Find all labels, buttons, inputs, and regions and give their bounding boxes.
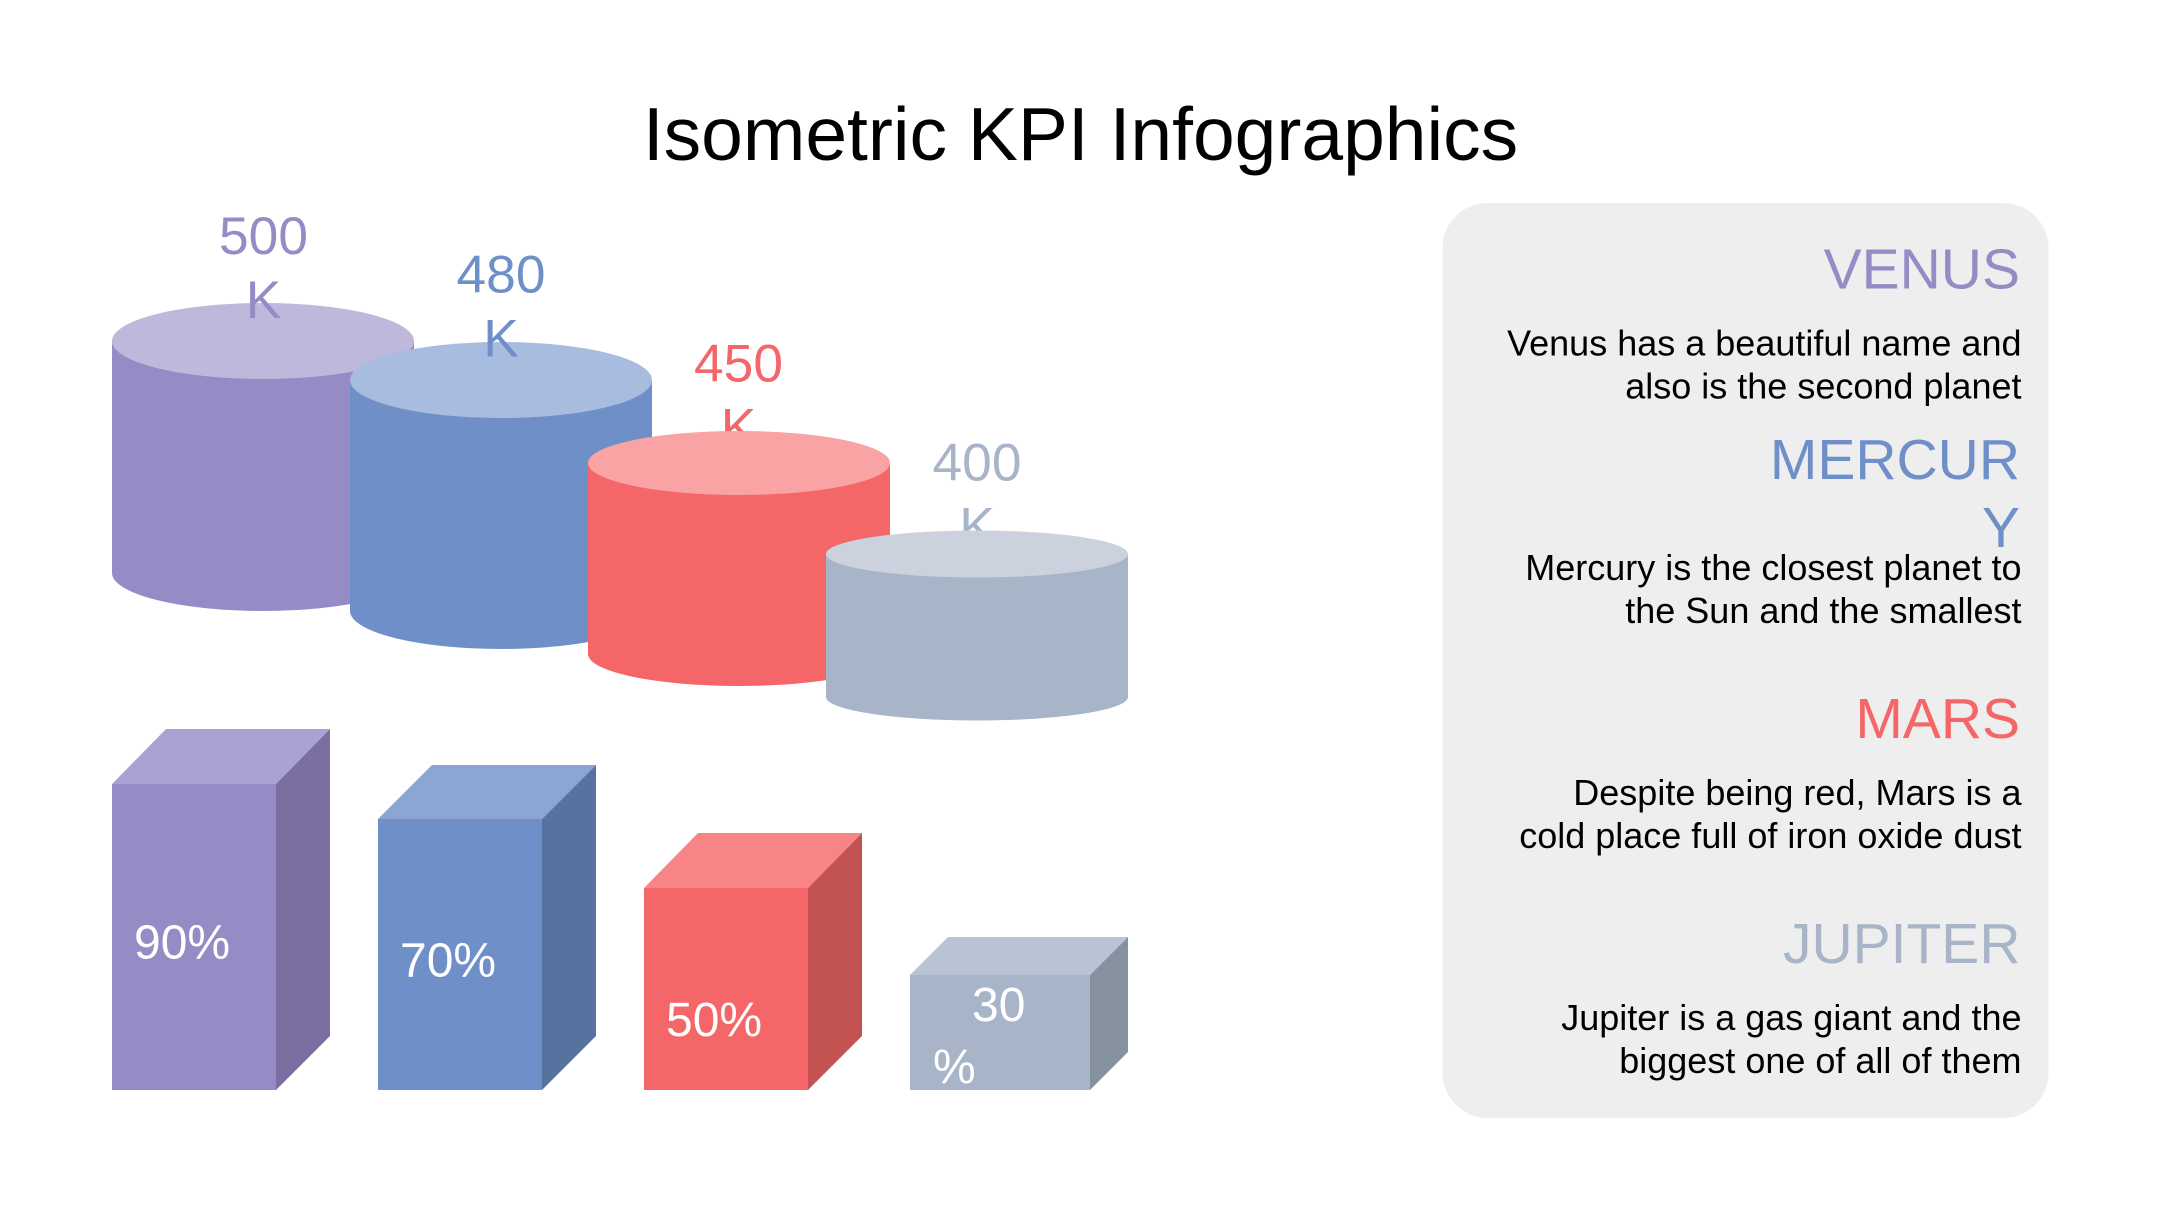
cylinder: red <box>588 431 890 686</box>
item: Mars <box>1519 687 2022 856</box>
item: Jupiter: JUPITER <box>1783 912 2020 976</box>
box: 90% <box>112 729 330 1090</box>
cylinder label: 450K: 450 <box>694 334 783 394</box>
box chart <box>112 729 1128 1094</box>
box: 30% <box>910 937 1128 1094</box>
item: Mercury <box>1525 428 2022 631</box>
cylinder label: 400K: 400 <box>933 434 1021 492</box>
cylinder label: 500K: K <box>246 271 281 330</box>
cylinder label: 450K: K <box>721 398 756 458</box>
box: 30%: % <box>933 1041 976 1094</box>
box: 30%: 30 <box>972 979 1025 1032</box>
item: Jupiter <box>1561 912 2022 1081</box>
panel: planets <box>1442 203 2048 1118</box>
cylinder: blue <box>350 342 652 649</box>
box: 90%: 90% <box>134 916 230 970</box>
cylinder label: 480K: K <box>483 310 519 368</box>
item: Jupiter: Jupiter is a gas giant and the <box>1561 997 2022 1038</box>
cylinder label: 400K <box>933 434 1021 556</box>
cylinder chart <box>112 207 1128 720</box>
item: Jupiter: biggest one of all of them <box>1619 1040 2022 1081</box>
box: 50%: 50% <box>666 994 762 1047</box>
cylinder label: 500K <box>219 207 308 330</box>
item: Mars: cold place full of iron oxide dust <box>1519 815 2022 856</box>
item: Venus <box>1507 238 2022 406</box>
cylinder label: 480K <box>457 246 545 368</box>
cylinder label: 500K: 500 <box>219 207 308 266</box>
item: Mars: Despite being red, Mars is a <box>1573 772 2022 813</box>
item: Venus: Venus has a beautiful name and <box>1507 322 2022 364</box>
item: Mercury: MERCUR <box>1770 428 2020 492</box>
item: Mars: MARS <box>1855 687 2020 751</box>
box: 50% <box>644 833 862 1090</box>
cylinder: grey <box>826 530 1128 720</box>
box: 70%: 70% <box>400 934 496 988</box>
title: Isometric KPI Infographics <box>643 92 1518 176</box>
item: Venus: VENUS <box>1824 238 2020 302</box>
cylinder label: 450K <box>694 334 783 458</box>
cylinder: purple <box>112 303 414 611</box>
item: Mercury: Mercury is the closest planet to <box>1525 547 2022 588</box>
box: 70% <box>378 765 596 1090</box>
item: Venus: also is the second planet <box>1625 366 2022 406</box>
item: Mercury: Y <box>1982 496 2020 560</box>
item: Mercury: the Sun and the smallest <box>1625 590 2022 631</box>
cylinder label: 480K: 480 <box>457 246 545 304</box>
cylinder label: 400K: K <box>959 498 995 556</box>
